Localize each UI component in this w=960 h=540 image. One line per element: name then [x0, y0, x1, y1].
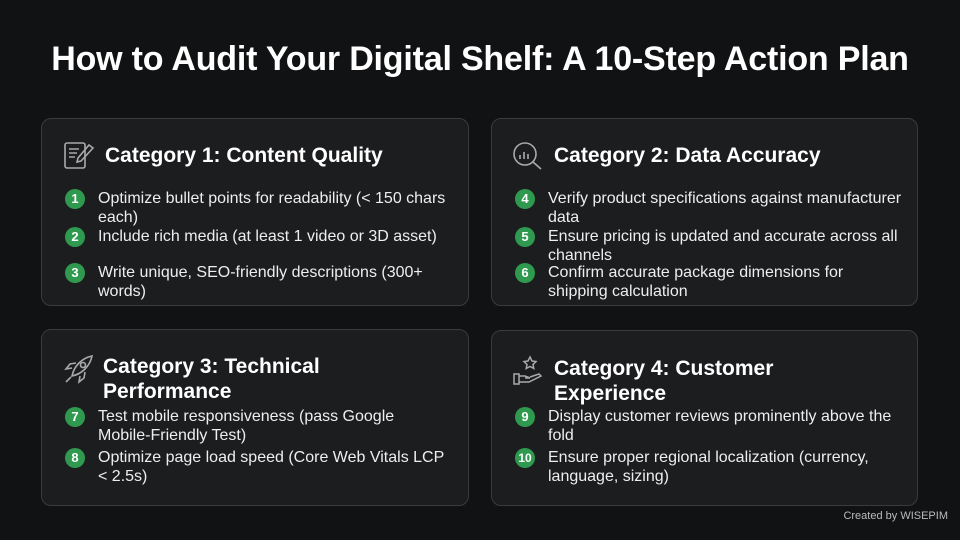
panel: technical performance — [41, 329, 469, 506]
panel: content quality: 3 — [71, 265, 79, 280]
item 7: Test mobile responsiveness (pass Google — [98, 408, 394, 425]
item 6 — [515, 263, 843, 300]
heading: Category 1: Content Quality — [105, 144, 383, 167]
icon: hand with star — [513, 356, 542, 385]
footer credit: Created by WISEPIM — [843, 510, 948, 522]
item 3 — [65, 263, 423, 300]
item 1: each) — [98, 208, 138, 226]
item 1 — [65, 189, 445, 226]
heading: Category 4: Customer — [554, 357, 773, 380]
item 10 — [515, 448, 869, 484]
panel: customer experience: 10 — [518, 451, 532, 465]
heading — [103, 355, 320, 403]
panel: content quality: 2 — [71, 229, 79, 244]
item 8 — [65, 448, 444, 484]
panel: technical performance: 8 — [71, 450, 79, 465]
item 3: words) — [98, 282, 146, 300]
title: How to Audit Your Digital Shelf: A 10-Step Action Plan — [51, 40, 909, 78]
item 7: Mobile-Friendly Test) — [98, 426, 246, 444]
item 2: Include rich media (at least 1 video or 3D asset) — [98, 228, 437, 245]
heading: Experience — [554, 382, 666, 405]
item 5: channels — [548, 246, 612, 264]
heading: Category 2: Data Accuracy — [554, 144, 820, 167]
item 8: < 2.5s) — [98, 468, 147, 484]
item 5 — [515, 227, 898, 264]
item 1: Optimize bullet points for readability (< 150 chars — [98, 190, 445, 207]
item 4 — [515, 189, 901, 226]
item 9: Display customer reviews prominently above the — [548, 408, 891, 425]
item 9 — [515, 407, 891, 444]
panel: customer experience — [491, 330, 918, 506]
panel: data accuracy — [491, 118, 918, 306]
icon: chart magnifier — [513, 142, 542, 170]
item 6: Confirm accurate package dimensions for — [548, 264, 843, 281]
icon: rocket — [64, 355, 93, 384]
item 10: Ensure proper regional localization (currency, — [548, 449, 869, 466]
panel: technical performance: 7 — [71, 409, 79, 424]
panel: data accuracy: 6 — [521, 265, 529, 280]
panel: customer experience: 9 — [521, 409, 529, 424]
item 3: Write unique, SEO-friendly descriptions (300+ — [98, 264, 423, 281]
item 7 — [65, 407, 394, 444]
item 8: Optimize page load speed (Core Web Vitals LCP — [98, 449, 444, 466]
item 4: data — [548, 208, 579, 226]
panel: data accuracy: 4 — [521, 191, 529, 206]
item 10: language, sizing) — [548, 468, 669, 484]
icon: document with pen — [64, 142, 94, 169]
item 5: Ensure pricing is updated and accurate across all — [548, 228, 898, 245]
heading — [554, 357, 774, 405]
item 9: fold — [548, 426, 574, 444]
panel: data accuracy: 5 — [521, 229, 529, 244]
panel: content quality: 1 — [71, 191, 79, 206]
heading: Performance — [103, 380, 231, 403]
item 6: shipping calculation — [548, 282, 688, 300]
panel: content quality — [41, 118, 469, 306]
heading: Category 3: Technical — [103, 355, 320, 378]
item 4: Verify product specifications against manufacturer — [548, 190, 901, 207]
